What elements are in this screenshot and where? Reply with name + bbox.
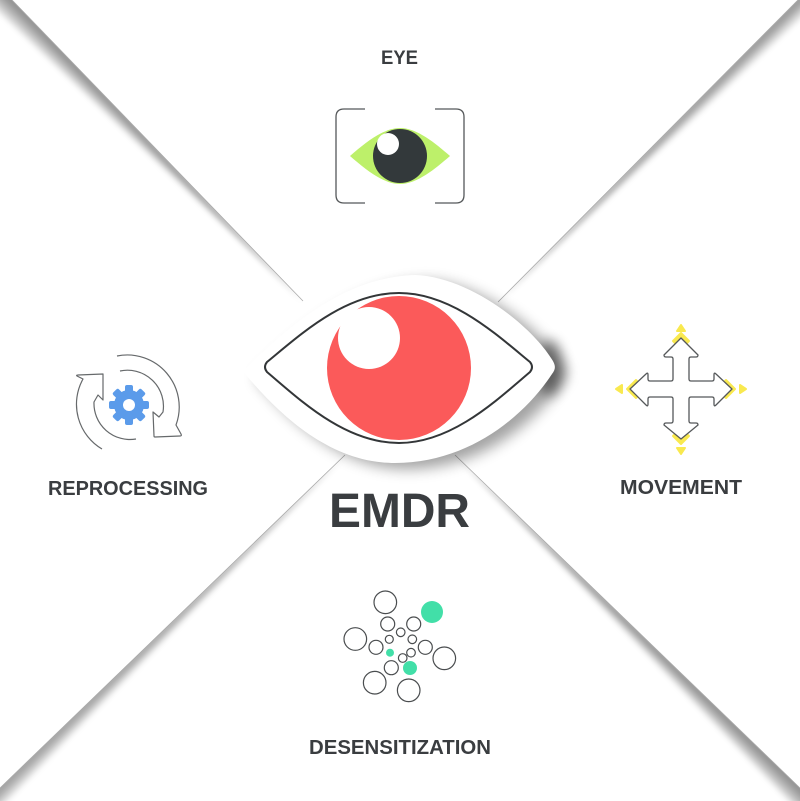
- heading: MOVEMENT: MOVEMENT: [620, 477, 742, 499]
- divider: bottom-right diagonal: [455, 455, 800, 801]
- outlined circles: [344, 591, 456, 702]
- icon: reprocessing cycle: [76, 355, 181, 449]
- heading: REPROCESSING: REPROCESSING: [48, 477, 208, 500]
- four-way arrow outline: [630, 338, 732, 439]
- white highlight: [377, 133, 399, 155]
- icon: desensitization circles: [344, 591, 456, 702]
- divider: top-right diagonal: [498, 0, 800, 302]
- dark iris: [373, 129, 427, 183]
- central eye sticker: [244, 275, 567, 469]
- title: EMDR: EMDR: [329, 485, 470, 538]
- upper-right cycle arrow: [117, 355, 181, 437]
- icon: eye in viewfinder: [336, 109, 464, 203]
- heading: DESENSITIZATION: DESENSITIZATION: [309, 737, 491, 759]
- yellow direction markers: [616, 325, 746, 454]
- sticker body: [244, 275, 555, 463]
- sticker shadow: [256, 281, 567, 469]
- iris highlight: [338, 307, 400, 369]
- heading: EYE: EYE: [381, 47, 418, 69]
- sticker tip shadow: [537, 340, 563, 396]
- eye outline: [265, 293, 532, 443]
- icon: movement arrows: [616, 325, 746, 454]
- green circles: [386, 601, 443, 675]
- viewfinder brackets: [336, 109, 464, 203]
- lower-left cycle arrow: [76, 374, 136, 449]
- blue gear: [109, 385, 149, 425]
- green eye shape: [350, 128, 450, 184]
- divider: top-left diagonal: [0, 0, 303, 301]
- red iris: [327, 296, 471, 440]
- divider: bottom-left diagonal: [0, 455, 345, 801]
